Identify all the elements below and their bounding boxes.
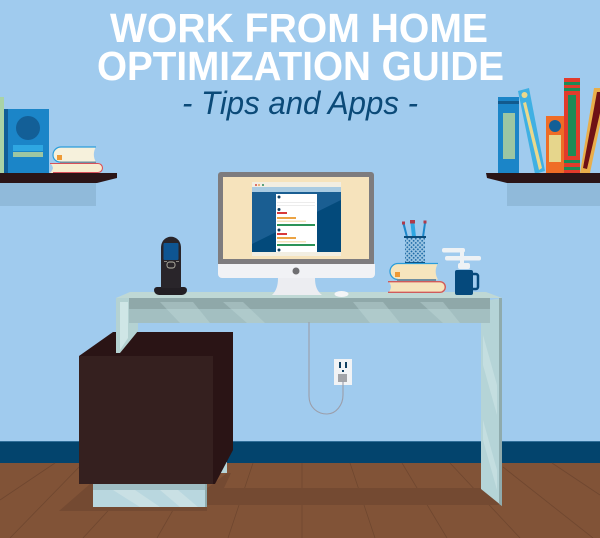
desk front apron [129,298,490,323]
desk top surface [116,292,502,298]
right stacked books [388,264,446,293]
power outlet and cord [309,322,352,414]
wooden floor [0,463,600,538]
baseboard [0,441,600,463]
mouse [334,291,348,297]
computer monitor [218,172,375,295]
floor shadow of desk [59,473,500,511]
webcam dot [292,268,300,274]
browser window [252,182,341,256]
title: OPTIMIZATION GUIDE [97,43,504,89]
shelf board [486,173,600,183]
desk [116,292,502,506]
blue book [4,109,49,174]
coffee mug with steam [442,248,481,295]
desk right leg [481,298,502,506]
shelf shadow [0,183,96,206]
phone [154,237,187,295]
shelf board [0,173,117,183]
subtitle: - Tips and Apps - [182,85,418,121]
green book [0,97,4,173]
orange book [546,116,565,174]
desk left leg [116,298,138,353]
pencil cup [402,220,426,263]
shelf shadow [507,183,600,206]
document page [276,194,317,252]
leaning maroon book [580,88,600,173]
stacked books [50,147,103,173]
drawer leg behind cabinet [220,462,227,473]
cabinet base glass [93,484,207,507]
monitor chin [218,264,375,278]
monitor bezel [218,172,374,264]
dark cabinet [79,332,233,484]
leaning light blue book [518,88,545,174]
red book [564,78,580,174]
screen wallpaper [223,177,369,259]
title [97,5,504,89]
tall blue book [498,97,519,174]
monitor stand [272,278,322,295]
title: WORK FROM HOME [110,5,488,51]
left shelf with books [0,97,117,206]
right shelf with books [486,78,600,206]
